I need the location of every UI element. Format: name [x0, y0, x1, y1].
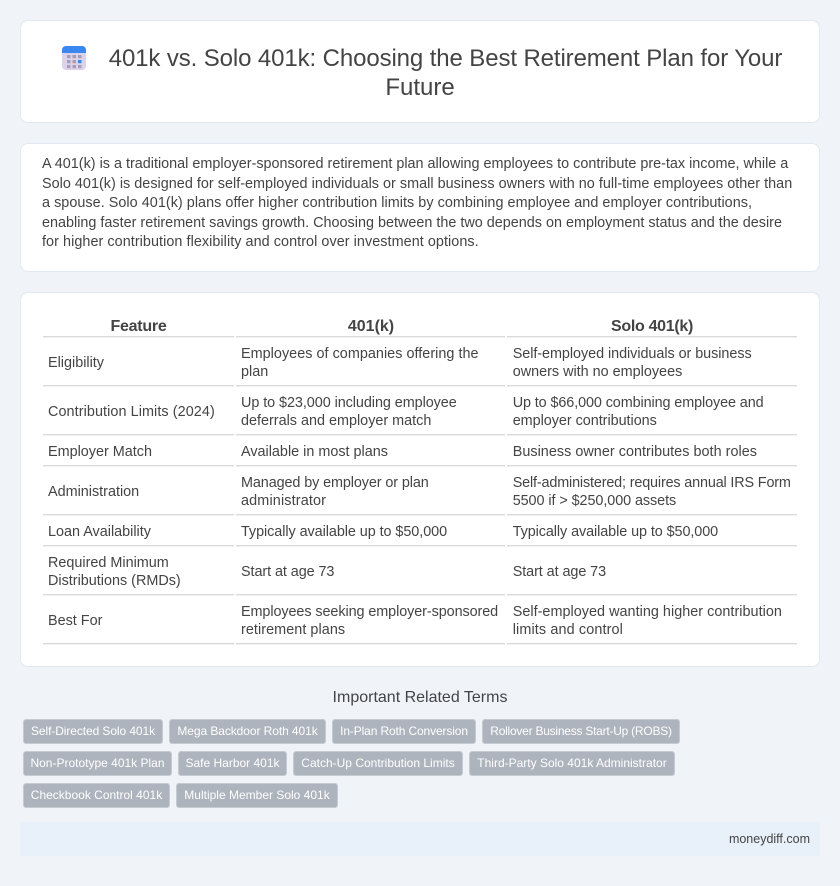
related term tags: Catch-Up Contribution Limits: [301, 756, 455, 770]
comparison table: Solo 401(k): [611, 318, 693, 335]
comparison table: Loan Availability: [48, 524, 151, 540]
comparison table: Start at age 73: [241, 564, 334, 580]
intro text: Solo 401(k) is designed for self-employed individuals or small business owners with no full-time employees other than: [42, 176, 792, 192]
related term tags: Safe Harbor 401k: [185, 756, 280, 770]
comparison table: Distributions (RMDs): [48, 573, 181, 589]
related term tags: In-Plan Roth Conversion: [340, 724, 468, 738]
related term tags: Checkbook Control 401k: [31, 788, 162, 802]
comparison table: [43, 318, 797, 645]
comparison table: plan: [241, 364, 268, 380]
comparison table: Required Minimum: [48, 555, 169, 571]
related term tags: Third-Party Solo 401k Administrator: [477, 756, 667, 770]
panel: comparison table: [20, 292, 820, 667]
related term tags: [23, 719, 680, 808]
comparison table: owners with no employees: [513, 364, 682, 380]
comparison table: Feature: [110, 318, 167, 335]
heading: related terms: Important Related Terms: [333, 689, 507, 706]
title: [109, 45, 782, 101]
comparison table: Up to $66,000 combining employee and: [513, 395, 764, 411]
comparison table: Typically available up to $50,000: [241, 524, 447, 540]
comparison table: Administration: [48, 484, 139, 500]
related term tags: Self-Directed Solo 401k: [31, 724, 155, 738]
intro text: for higher contribution flexibility and control over investment options.: [42, 234, 479, 250]
comparison table: administrator: [241, 493, 326, 509]
comparison table: deferrals and employer match: [241, 413, 431, 429]
panel: intro: [20, 143, 820, 272]
comparison table: Employer Match: [48, 444, 152, 460]
comparison table: Self-employed individuals or business: [513, 346, 752, 362]
related term tags: Multiple Member Solo 401k: [184, 788, 330, 802]
comparison table: Business owner contributes both roles: [513, 444, 757, 460]
comparison table: 401(k): [348, 318, 394, 335]
intro text: A 401(k) is a traditional employer-sponsored retirement plan allowing employees to contribute pre-tax income, while a: [42, 156, 788, 172]
comparison table: Typically available up to $50,000: [513, 524, 718, 540]
comparison table: 5500 if > $250,000 assets: [513, 493, 676, 509]
related term tags: Mega Backdoor Roth 401k: [177, 724, 318, 738]
comparison table: Eligibility: [48, 355, 104, 371]
comparison table: Employees seeking employer-sponsored: [241, 604, 498, 620]
comparison table: Self-employed wanting higher contribution: [513, 604, 782, 620]
intro text: [42, 156, 792, 250]
comparison table: Best For: [48, 613, 102, 629]
comparison table: limits and control: [513, 622, 623, 638]
comparison table: Managed by employer or plan: [241, 475, 429, 491]
title: Future: [385, 74, 455, 101]
footer: [20, 822, 820, 856]
comparison table: Up to $23,000 including employee: [241, 395, 457, 411]
icon: calendar: [62, 46, 86, 70]
comparison table: Employees of companies offering the: [241, 346, 479, 362]
intro text: a spouse. Solo 401(k) plans offer higher contribution limits by combining employee and employer contributions,: [42, 195, 752, 211]
comparison table: Self-administered; requires annual IRS Form: [513, 475, 791, 491]
title: 401k vs. Solo 401k: Choosing the Best Retirement Plan for Your: [109, 45, 782, 72]
comparison table: employer contributions: [513, 413, 657, 429]
related term tags: Rollover Business Start-Up (ROBS): [490, 724, 672, 738]
intro text: enabling faster retirement savings growth. Choosing between the two depends on employment status and the desire: [42, 215, 782, 231]
comparison table: retirement plans: [241, 622, 345, 638]
related term tags: Non-Prototype 401k Plan: [30, 756, 165, 770]
panel: header: [20, 20, 820, 123]
source text: moneydiff.com: [729, 832, 810, 846]
comparison table: Contribution Limits (2024): [48, 404, 215, 420]
comparison table: Start at age 73: [513, 564, 606, 580]
comparison table: Available in most plans: [241, 444, 388, 460]
